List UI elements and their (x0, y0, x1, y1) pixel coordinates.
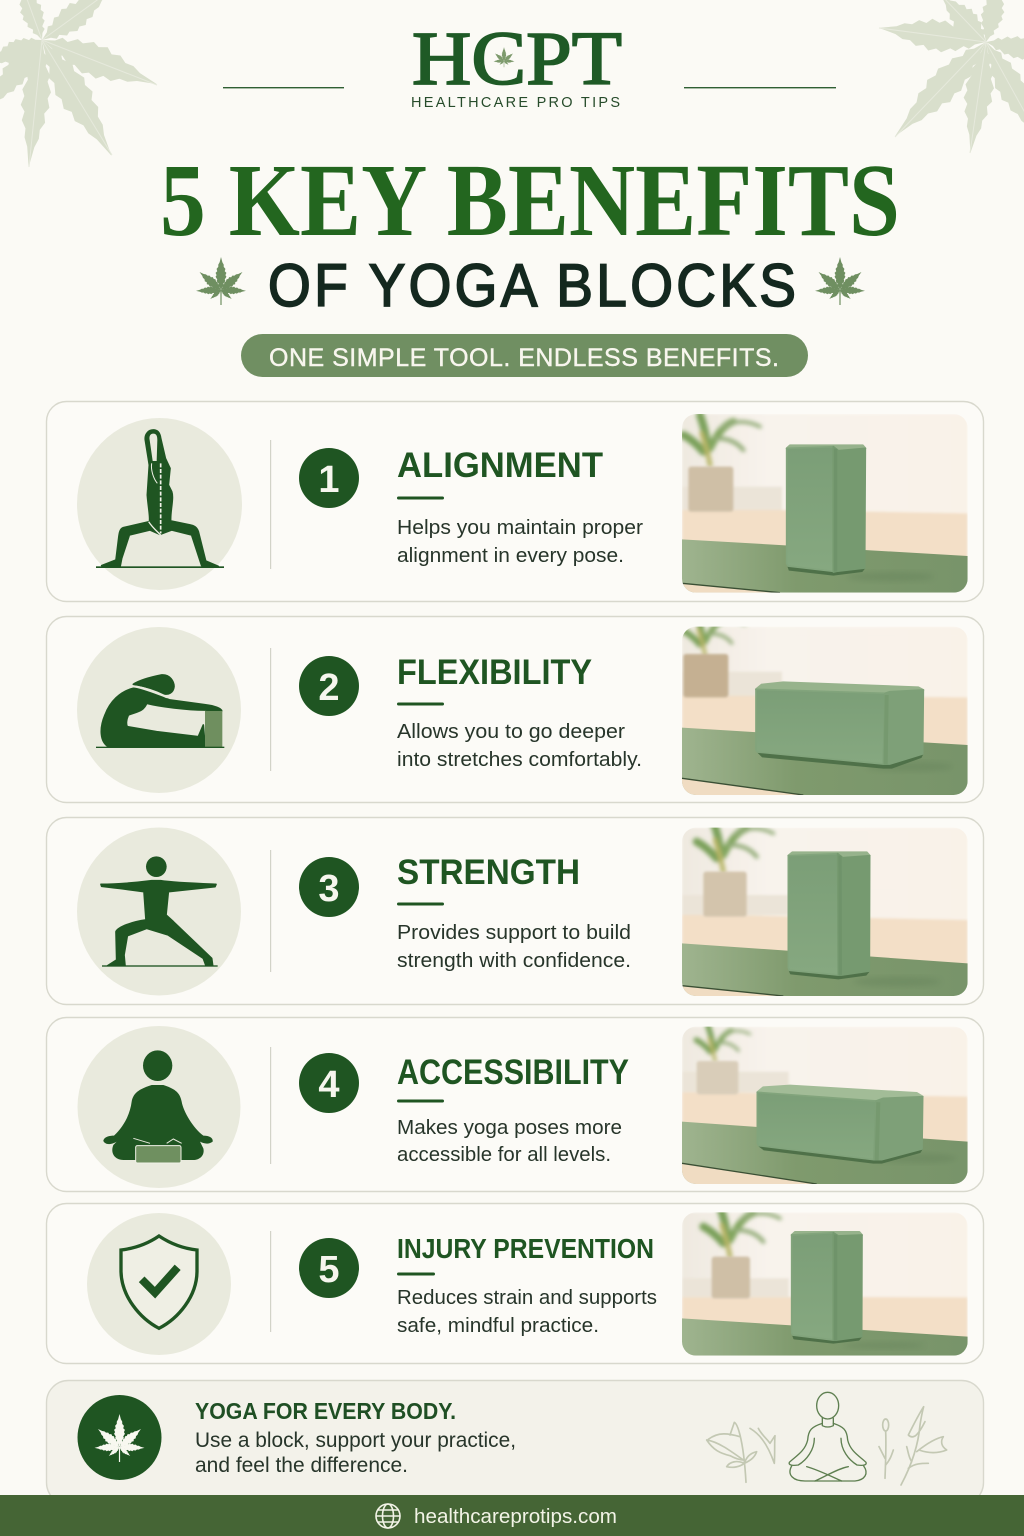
text: website: healthcareprotips.com (414, 1505, 617, 1528)
number 4 (299, 1053, 359, 1113)
text: accessibility description: accessible for all levels. (397, 1144, 611, 1166)
footer bar (0, 1495, 1024, 1536)
icon: white leaf badge (78, 1395, 162, 1480)
heading: injury prevention: INJURY PREVENTION (397, 1233, 654, 1264)
text: alignment description: alignment in every pose. (397, 545, 624, 567)
number 2 (299, 656, 359, 716)
text: injury prevention description: Reduces strain and supports (397, 1287, 657, 1309)
photo: horizontal yoga block (682, 615, 968, 795)
number 5 (299, 1238, 359, 1298)
text: flexibility description (397, 721, 642, 771)
text: injury prevention description: safe, mindful practice. (397, 1315, 599, 1337)
heading: accessibility: ACCESSIBILITY (397, 1053, 629, 1092)
logo: HCPT (412, 17, 622, 101)
text: flexibility description: Allows you to go deeper (397, 721, 625, 743)
panel: accessibility (46, 1018, 984, 1192)
decorative leaf: top left (0, 0, 163, 169)
heading: strength: STRENGTH (397, 853, 580, 892)
text: injury prevention description (397, 1287, 657, 1337)
text: banner message: and feel the difference. (195, 1454, 408, 1477)
icon: globe (376, 1504, 400, 1528)
panel: injury prevention (46, 1204, 984, 1364)
photo: horizontal yoga block (682, 1026, 968, 1184)
number 5: 5 (318, 1249, 340, 1291)
number 4: 4 (318, 1064, 340, 1106)
heading: alignment: ALIGNMENT (397, 446, 603, 485)
number 3: 3 (318, 868, 340, 910)
text: banner message: Use a block, support your practice, (195, 1429, 516, 1452)
icon: meditation outline with botanicals (707, 1392, 947, 1485)
number 1: 1 (318, 459, 340, 501)
icon: alignment pose (77, 418, 242, 590)
text: strength description: Provides support to build (397, 922, 631, 944)
number 3 (299, 857, 359, 917)
panel: closing banner (46, 1380, 984, 1504)
panel: strength (46, 818, 984, 1004)
photo: upright yoga block (682, 822, 968, 996)
photo: upright yoga block (682, 414, 968, 593)
number 2: 2 (318, 667, 340, 709)
heading: flexibility: FLEXIBILITY (397, 653, 592, 692)
text: accessibility description: Makes yoga poses more (397, 1117, 622, 1139)
icon: seated forward fold with block (77, 627, 241, 793)
tagline pill: ONE SIMPLE TOOL. ENDLESS BENEFITS. (269, 344, 779, 372)
text: banner message (195, 1429, 516, 1477)
decorative leaf: top right (877, 0, 1024, 155)
tagline pill (241, 334, 808, 377)
photo: upright yoga block (682, 1207, 968, 1356)
subtitle: OF YOGA BLOCKS (268, 253, 796, 320)
icon: shield with check (87, 1213, 231, 1355)
icon: warrior pose (77, 828, 241, 996)
panel: alignment (46, 402, 984, 602)
text: strength description: strength with confidence. (397, 950, 631, 972)
text: alignment description (397, 517, 643, 567)
text: accessibility description (397, 1117, 622, 1166)
logo: HEALTHCARE PRO TIPS (411, 95, 620, 111)
title: 5 KEY BENEFITS (160, 143, 900, 258)
text: flexibility description: into stretches comfortably. (397, 749, 642, 771)
panel: flexibility (46, 615, 984, 802)
text: alignment description: Helps you maintain proper (397, 517, 643, 539)
icon: seated meditation with block (78, 1026, 240, 1188)
text: banner heading: YOGA FOR EVERY BODY. (195, 1398, 456, 1424)
number 1 (299, 448, 359, 508)
text: strength description (397, 922, 631, 972)
